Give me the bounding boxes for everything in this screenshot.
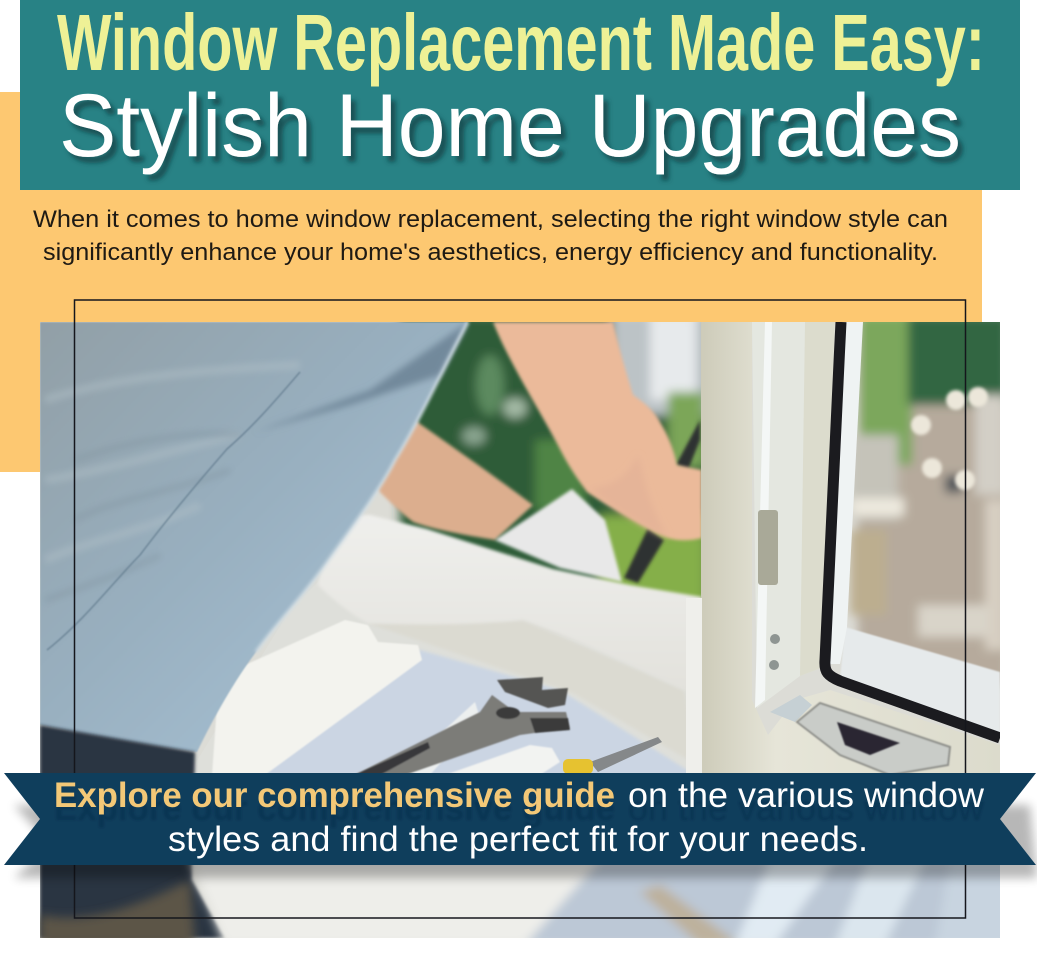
film edge strip on sill: [686, 598, 702, 776]
ribbon line 1 remainder: on the various window: [628, 776, 985, 815]
photo backdrop: [40, 322, 1000, 938]
shadowed blue part of sill: [250, 650, 695, 775]
blue window corner piece: [770, 695, 812, 722]
arm shaded crease: [592, 495, 666, 540]
white film bundle near the hands: [495, 489, 622, 582]
blue-grey shirt: [40, 322, 468, 752]
frame white highlight strip: [755, 322, 772, 708]
wrench handle: [354, 695, 570, 775]
call-to-action ribbon: [4, 773, 1037, 878]
shirt wrinkle shading: [45, 365, 300, 560]
shirt body: [40, 322, 468, 752]
blurred garden behind the worker: [400, 315, 710, 605]
street bokeh lights: [911, 387, 988, 490]
title banner: [20, 0, 1020, 190]
sunlit patch on the sill: [212, 620, 422, 775]
ribbon bold highlight: Explore our comprehensive guide: [54, 776, 615, 815]
wrench upper jaw: [497, 677, 568, 708]
hinge plate: [758, 510, 778, 585]
ribbon shadow: [14, 805, 1037, 878]
intro paragraph: [33, 206, 948, 266]
frame right shaded band: [800, 322, 835, 676]
frame screw top: [770, 634, 780, 644]
blurred bottom foreground: [40, 860, 1010, 945]
intro line 1: When it comes to home window replacement, selecting the right window style can: [33, 206, 948, 233]
photo: worker fitting a new window: [40, 315, 1010, 945]
wrench worm screw: [496, 707, 520, 719]
glass ledge with film: [840, 627, 1000, 738]
teal banner background: [20, 0, 1020, 190]
lower face of wrapped roll: [384, 622, 686, 755]
metal window latch: [797, 703, 950, 775]
sun patch right of wrench: [445, 745, 560, 775]
wrench lower jaw: [530, 718, 570, 733]
shirt wrinkle dark lines: [45, 434, 240, 600]
window frame inner rail: [752, 322, 805, 708]
sash white side: [830, 322, 863, 664]
intro line 2: significantly enhance your home's aesthetics, energy efficiency and functionality.: [43, 239, 938, 266]
ribbon shape: [4, 773, 1036, 865]
latch dark slot: [837, 722, 900, 755]
near arm and hand: [493, 322, 702, 540]
black window seal: [825, 322, 1000, 738]
sun patch near wrench: [410, 702, 478, 773]
dark jeans: [40, 725, 225, 938]
orange background panel: [0, 92, 982, 472]
frame screw bottom: [769, 660, 779, 670]
sill base: [190, 560, 700, 780]
window frame casing: [701, 322, 1000, 780]
wrapped roll of protective film: [318, 515, 702, 695]
adjustable wrench: [354, 677, 570, 775]
shirt light edge: [256, 322, 468, 652]
yellow screwdriver handle: [563, 759, 593, 774]
thin black frame outline: [74, 300, 966, 918]
shirt seam: [47, 372, 300, 650]
dark fold near the shoulder: [280, 324, 469, 425]
tool handle behind the hand: [624, 420, 700, 583]
far arm: [377, 419, 533, 540]
screwdriver shaft: [590, 737, 662, 772]
ribbon line 2: styles and find the perfect fit for your needs.: [168, 820, 868, 859]
blurred street outside: [850, 315, 1008, 685]
wrench handle dark edge: [354, 742, 430, 775]
title line 2: Stylish Home Upgrades: [59, 75, 961, 175]
